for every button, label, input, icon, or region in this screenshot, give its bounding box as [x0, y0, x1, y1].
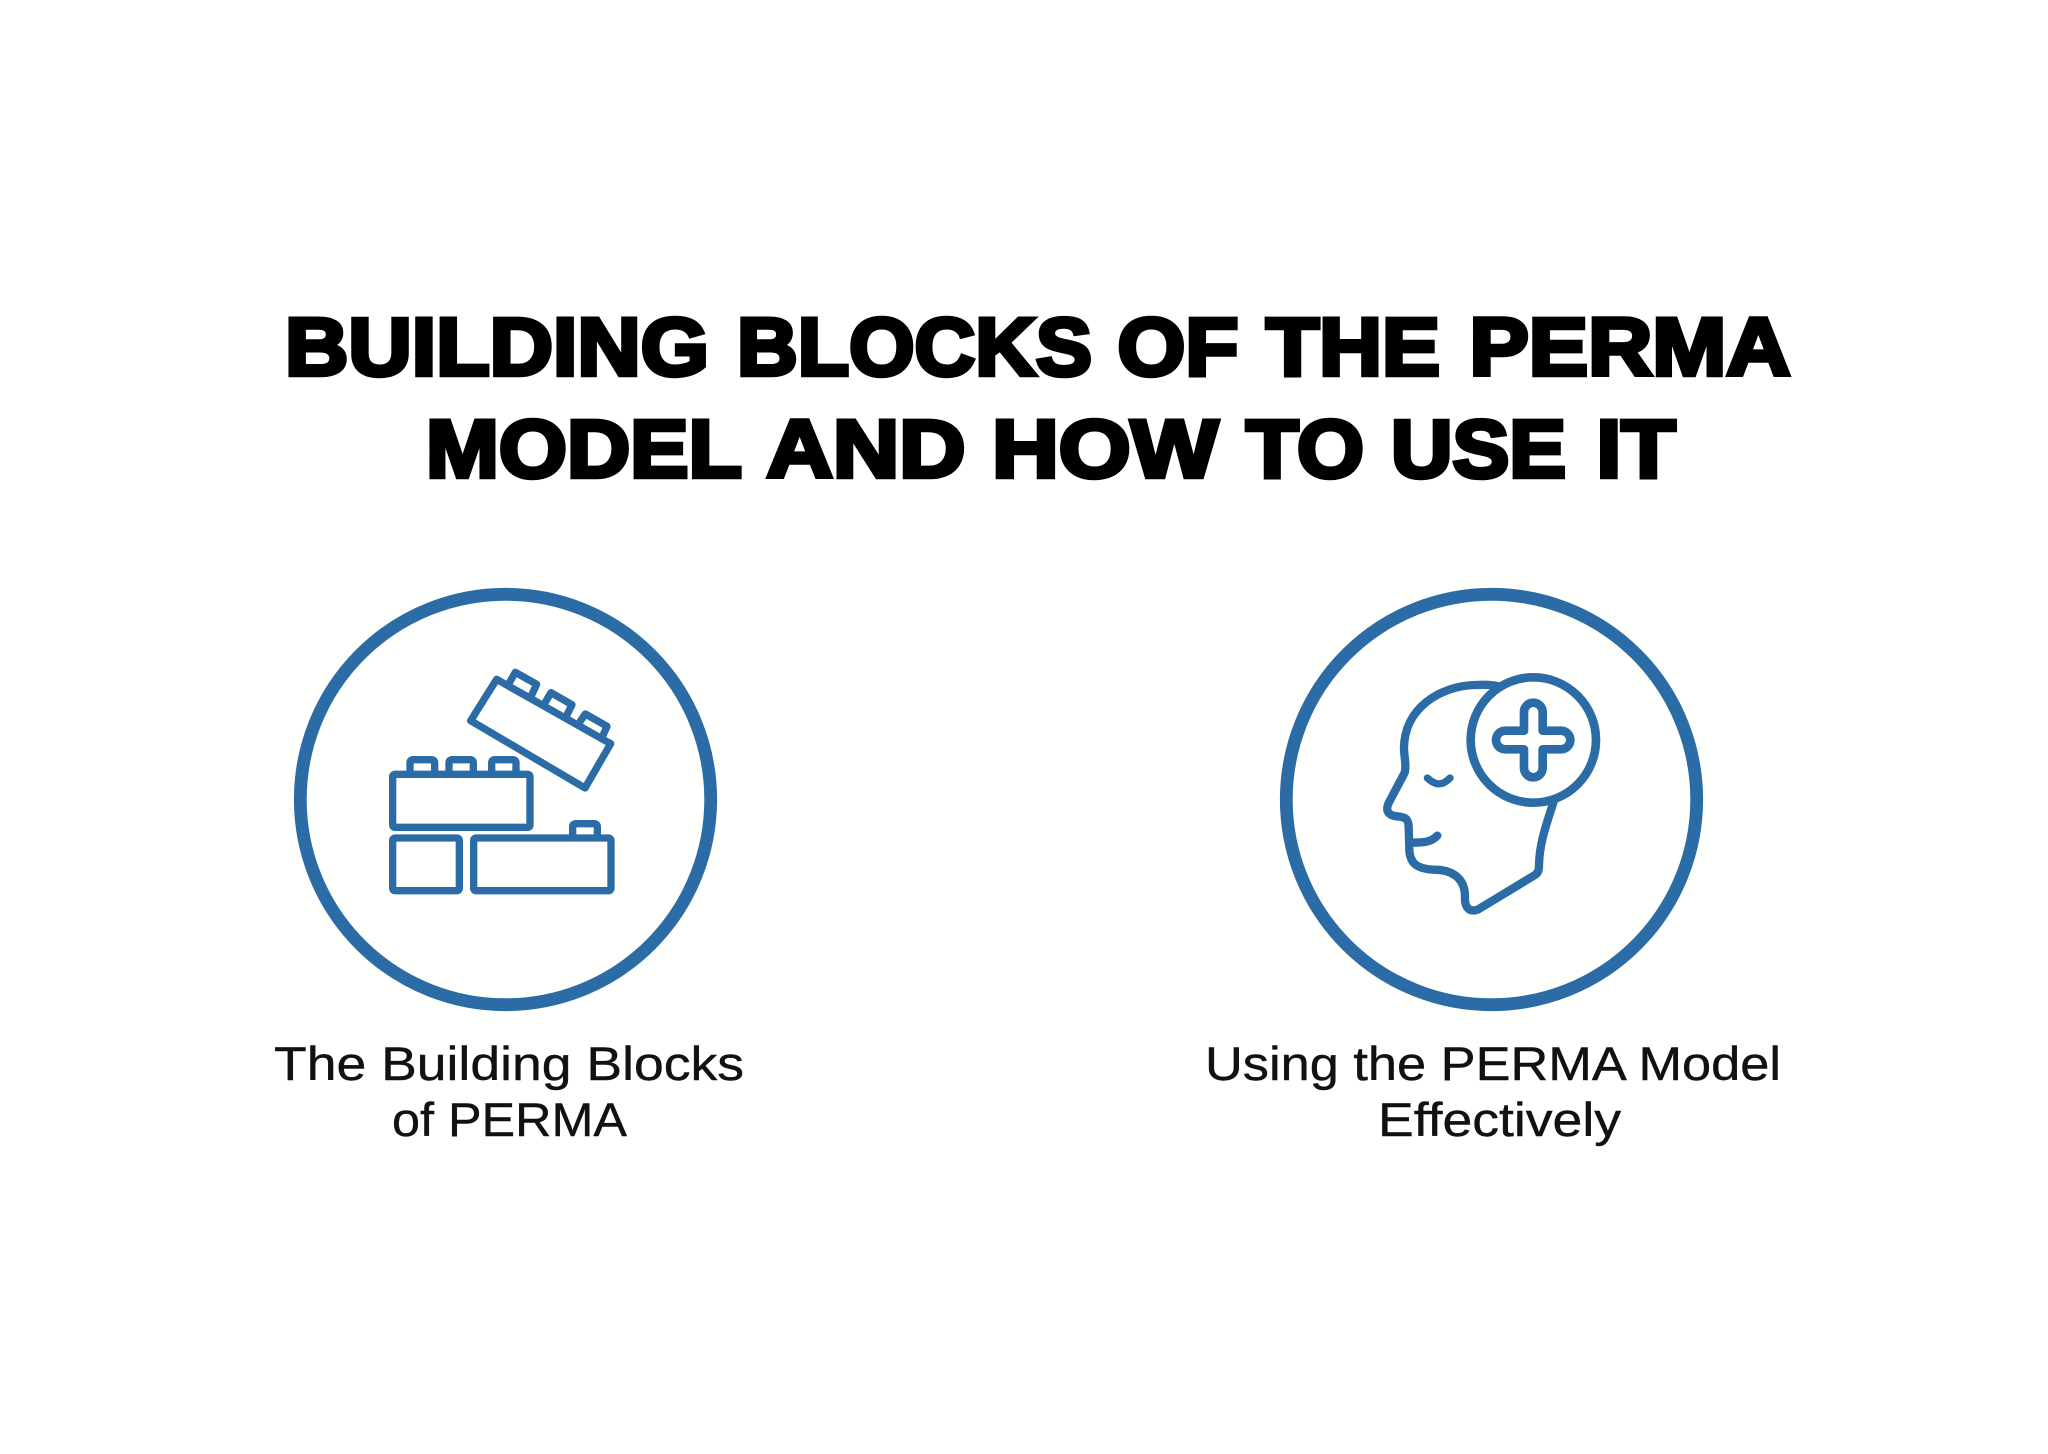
- title: OF: [1118, 302, 1238, 393]
- icon: blocks in circle: [300, 594, 711, 1005]
- title: USE: [1391, 404, 1566, 495]
- label: the building blocks of perma: The Building Blocks: [274, 1037, 744, 1090]
- title: THE: [1266, 302, 1440, 393]
- title: BLOCKS: [737, 302, 1092, 393]
- label: using the perma model effectively: Effectively: [1378, 1093, 1622, 1146]
- label: using the perma model effectively: [1205, 1037, 1781, 1146]
- title: [285, 302, 1790, 495]
- title: HOW: [992, 404, 1219, 495]
- label: using the perma model effectively: Using the PERMA Model: [1205, 1037, 1781, 1090]
- title: MODEL: [426, 404, 742, 495]
- label: the building blocks of perma: of PERMA: [392, 1093, 628, 1146]
- title: BUILDING: [285, 302, 709, 393]
- title: TO: [1246, 404, 1364, 495]
- panel: using the model: [1205, 594, 1781, 1146]
- icon: head with plus in circle: [1286, 594, 1697, 1005]
- title: PERMA: [1470, 302, 1790, 393]
- title: IT: [1596, 404, 1676, 495]
- panel: the building blocks: [274, 594, 744, 1146]
- label: the building blocks of perma: [274, 1037, 744, 1146]
- title: AND: [766, 404, 966, 495]
